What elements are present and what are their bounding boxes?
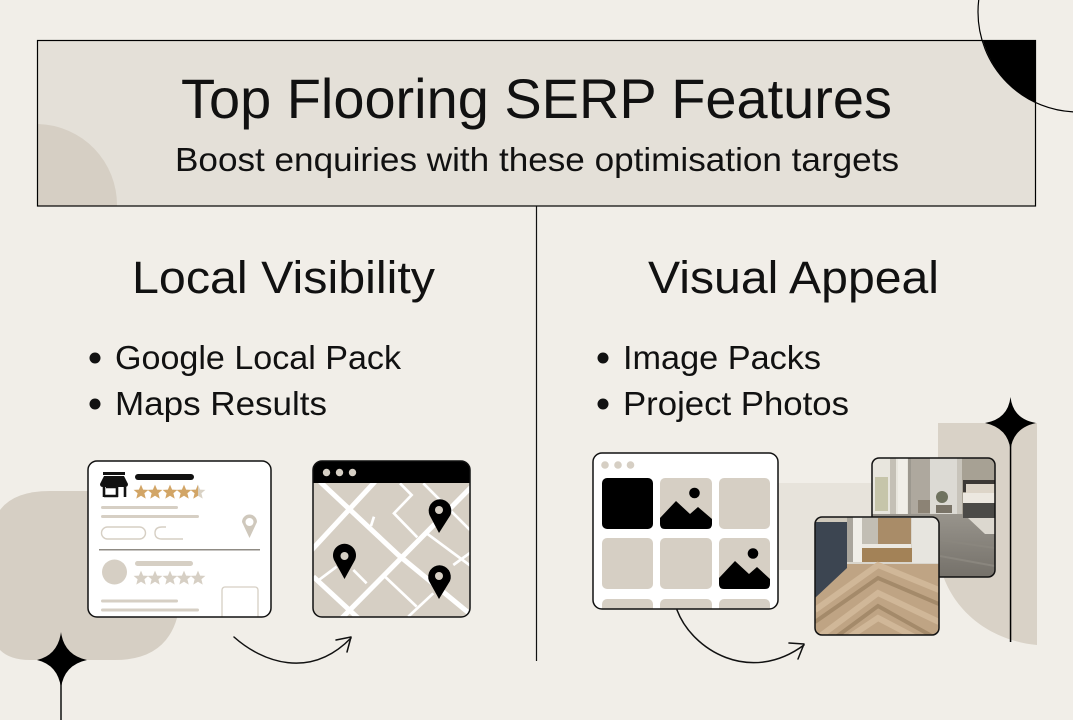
panel: visual appeal <box>593 252 995 663</box>
gold star rating <box>134 485 205 499</box>
header border <box>38 40 1036 206</box>
pill buttons <box>102 527 183 539</box>
photo: bedroom <box>872 458 995 577</box>
listing lines <box>101 506 199 518</box>
map roads <box>312 482 473 620</box>
browser dots <box>323 469 356 476</box>
heading: visual appeal: Visual Appeal <box>648 252 939 303</box>
subtitle: Boost enquiries with these optimisation targets <box>175 141 899 178</box>
icon: image placeholder one <box>660 488 712 529</box>
icon: image placeholder two <box>719 548 770 589</box>
review name bar <box>135 561 193 566</box>
review lines <box>101 600 199 612</box>
decorative band behind image panel <box>778 483 873 570</box>
arrow: local pack to map <box>234 637 351 663</box>
bullet list: local: Maps Results <box>115 385 327 422</box>
bullet list: local: Google Local Pack <box>115 339 402 376</box>
map card <box>312 461 473 620</box>
icon: storefront <box>100 472 128 497</box>
image pack window <box>593 453 778 619</box>
photo: herringbone floor <box>815 517 939 640</box>
avatar circle <box>102 560 127 584</box>
heading: local visibility: Local Visibility <box>132 252 436 303</box>
map browser bar <box>313 461 470 483</box>
local pack card <box>88 461 271 627</box>
thumbnail outline <box>221 586 259 616</box>
card divider <box>99 549 260 550</box>
centre divider <box>536 206 538 661</box>
image tiles <box>602 478 770 619</box>
bullet list: visual: Image Packs <box>623 339 821 376</box>
business name bar <box>135 474 194 480</box>
panel: local visibility <box>88 252 473 663</box>
icon: grey map pin <box>242 515 257 538</box>
grey star rating <box>134 571 205 585</box>
decorative shape: left blob <box>0 491 177 660</box>
bullet list: local <box>90 339 402 422</box>
header black corner <box>983 41 1036 103</box>
window dots <box>601 461 634 469</box>
bullet list: visual: Project Photos <box>623 385 849 422</box>
decorative circle outline <box>978 0 1073 112</box>
map pins <box>333 499 451 599</box>
title: Top Flooring SERP Features <box>181 67 892 130</box>
header corner quarter circle <box>38 124 117 206</box>
decorative shape: right arch <box>938 423 1037 645</box>
header banner <box>38 40 1036 206</box>
bullet list: visual <box>598 339 849 422</box>
decorative star: bottom left <box>37 632 87 720</box>
arrow: image pack to photos <box>677 610 804 663</box>
decorative star: right <box>985 397 1036 642</box>
